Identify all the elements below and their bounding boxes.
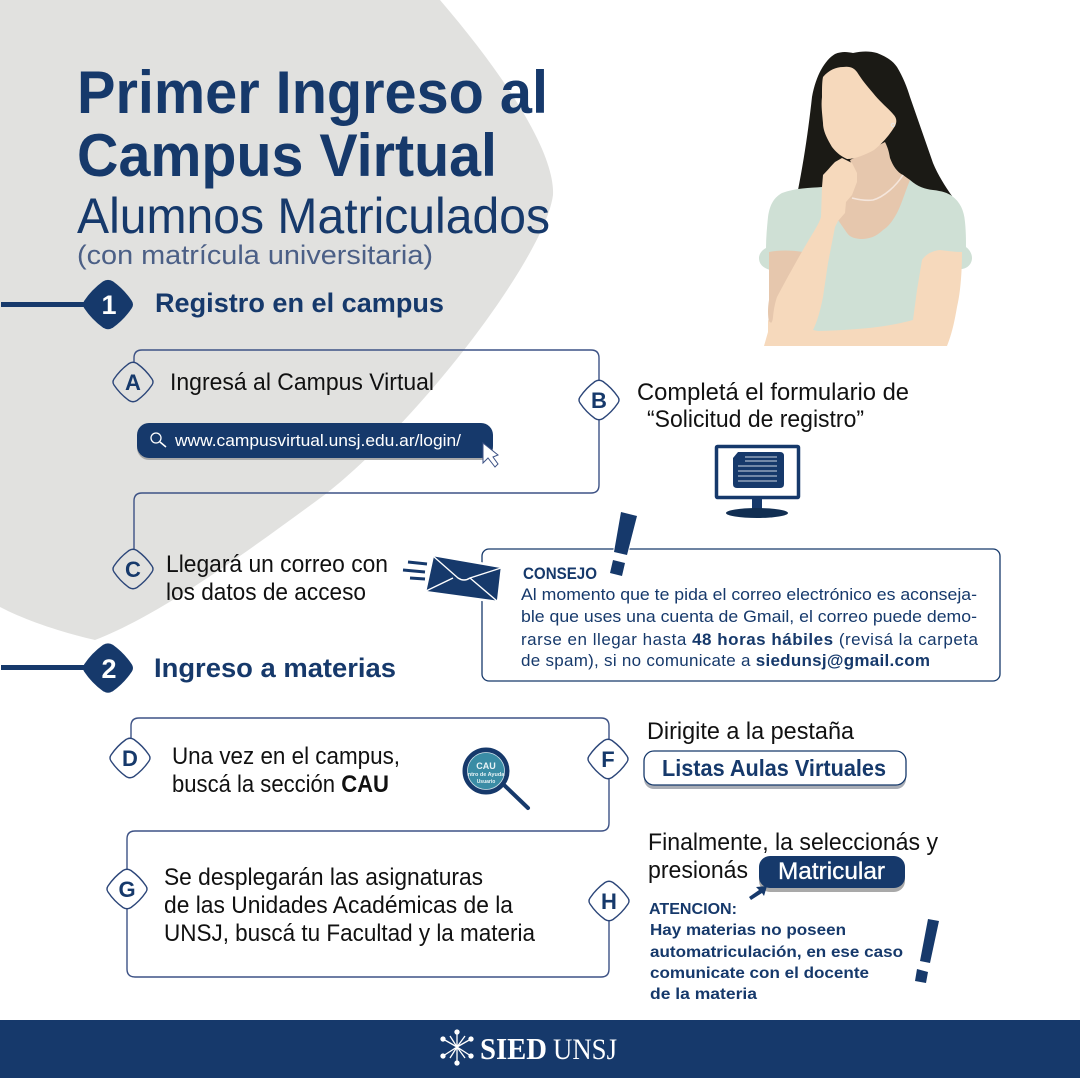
icon: CAU magnifier [465,750,528,808]
footer bar [0,1020,1080,1078]
icon: SIED logo [441,1030,473,1065]
consejo body: ble que uses una cuenta de Gmail, el correo puede demo- [521,607,977,626]
logo wordmark [480,1031,617,1066]
badge G [107,869,147,909]
badge G: G [118,877,136,902]
subtitle: Alumnos Matriculados [77,188,550,244]
atencion note: comunicate con el docente [650,965,869,982]
badge B [579,380,619,420]
step F text: Dirigite a la pestaña [647,718,855,745]
section 2 heading: Ingreso a materias [154,653,396,683]
title: Primer Ingreso al [77,59,548,126]
button: matricular [759,856,905,892]
section 1 marker [1,280,133,329]
step C text [166,551,388,606]
icon: exclamation [610,512,637,576]
title: Campus Virtual [77,122,497,189]
icon: monitor with form [716,446,798,518]
icon: envelope [403,555,502,602]
badge H: H [601,889,617,914]
section 2 marker [1,643,133,693]
panel: consejo [482,512,1000,681]
badge D [110,738,150,778]
url search bar [137,423,493,460]
consejo body: rarse en llegar hasta 48 horas hábiles (revisá la carpeta [521,630,979,649]
button: listas aulas virtuales [644,751,906,789]
badge A [113,362,153,402]
button: matricular: Matricular [778,858,885,885]
step D text: Una vez en el campus, [172,743,400,770]
logo wordmark: SIED [480,1031,547,1066]
badge C [113,549,153,589]
badge A: A [125,370,141,395]
title [77,59,548,189]
atencion note: Hay materias no poseen [650,922,846,939]
section 1 heading: Registro en el campus [155,288,444,318]
badge B: B [591,388,607,413]
atencion note [649,901,903,1003]
consejo body [521,585,979,670]
connector box 1 [134,350,599,550]
icon: exclamation [915,919,939,983]
illustration: thinking woman [759,52,972,346]
url search bar: www.campusvirtual.unsj.edu.ar/login/ [174,432,461,450]
badge D: D [122,746,138,771]
icon: CAU magnifier: CAU [476,761,496,771]
badge H [589,881,629,921]
step B text [637,379,909,433]
badge F [588,739,628,779]
icon: cursor [483,443,498,467]
step G text: Se desplegarán las asignaturas [164,864,483,891]
background shape [0,0,553,640]
consejo body: Al momento que te pida el correo electrónico es aconseja- [521,585,977,604]
section 1 marker: 1 [101,290,117,320]
atencion note: ATENCION: [649,901,737,918]
step G text: de las Unidades Académicas de la [164,892,514,919]
step G text: UNSJ, buscá tu Facultad y la materia [164,920,536,947]
icon: CAU magnifier: Usuario [477,779,495,785]
atencion note: de la materia [650,986,757,1003]
consejo heading: CONSEJO [523,564,597,583]
badge F: F [601,747,615,772]
step G text [164,864,536,947]
subtitle note: (con matrícula universitaria) [77,240,433,270]
section 2 marker: 2 [101,654,117,684]
step H text: presionás [648,857,748,884]
step C text: Llegará un correo con [166,551,388,578]
step H text [648,829,938,884]
connector box 2 [127,718,609,977]
icon: CAU magnifier: ntro de Ayuda [468,772,505,778]
step A text: Ingresá al Campus Virtual [170,369,434,396]
step D text: buscá la sección CAU [172,771,389,798]
badge C: C [125,557,141,582]
step B text: “Solicitud de registro” [647,406,864,433]
step C text: los datos de acceso [166,579,366,606]
button: listas aulas virtuales: Listas Aulas Virtuales [662,755,886,781]
step B text: Completá el formulario de [637,379,909,406]
consejo body: de spam), si no comunicate a siedunsj@gmail.com [521,651,930,670]
atencion note: automatriculación, en ese caso [650,944,903,961]
step D text [172,743,400,798]
arrow to matricular [749,886,767,900]
logo wordmark: UNSJ [553,1033,617,1066]
step H text: Finalmente, la seleccionás y [648,829,938,856]
